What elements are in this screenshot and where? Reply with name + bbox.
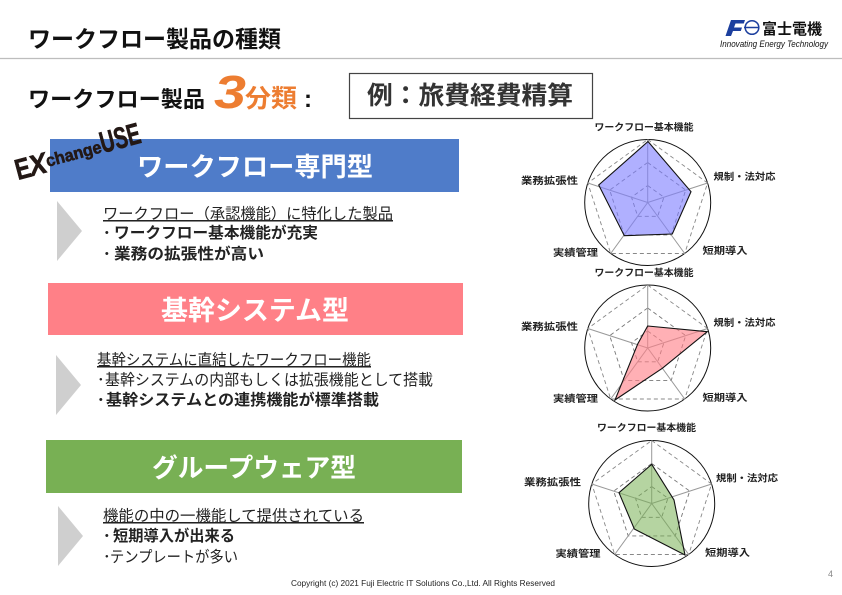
radar chart 1: 実績管理 (553, 247, 599, 259)
arrow 2 (56, 355, 81, 415)
radar chart 1: 業務拡張性 (521, 175, 579, 187)
text block 1: 業務の拡張性が高い (114, 245, 264, 263)
radar chart 1: ワークフロー基本機能 (594, 122, 694, 134)
arrow 3 (58, 506, 83, 566)
text block 1: ･ (103, 225, 111, 242)
logo: ExchangeUSE: E (12, 152, 34, 187)
logo: ExchangeUSE: change (44, 138, 104, 171)
radar chart 1 (521, 122, 776, 266)
text block 3: 機能の中の一機能して提供されている (103, 508, 364, 525)
logo: Fuji Electric: 富士電機 (762, 20, 822, 38)
subtitle: three categories (28, 66, 312, 118)
radar chart 1: 規制・法対応 (714, 171, 776, 183)
band: core system (48, 283, 463, 335)
radar chart 2: 実績管理 (553, 393, 599, 405)
logo: ExchangeUSE: X (23, 147, 52, 184)
text block 3: 短期導入が出来る (113, 527, 235, 545)
radar chart 2: 業務拡張性 (521, 321, 579, 333)
text block 3: ･ (103, 549, 111, 566)
radar chart 1: 短期導入 (702, 245, 748, 257)
band: groupware (46, 440, 462, 493)
subtitle: three categories: 3 (214, 66, 247, 118)
text block 2: ･ (97, 372, 105, 389)
logo: ExchangeUSE: USE (96, 117, 144, 160)
radar chart 2: ワークフロー基本機能 (594, 267, 694, 279)
text block 3: ･ (103, 528, 111, 545)
example box: 例：旅費経費精算 (367, 82, 573, 110)
logo: ExchangeUSE (10, 117, 145, 187)
text block 2 (97, 352, 433, 409)
radar chart 3: 業務拡張性 (524, 476, 582, 488)
text block 1: ･ (103, 246, 111, 263)
example box (350, 74, 592, 118)
band: workflow specialised: ワークフロー専門型 (137, 152, 373, 182)
radar chart 3 (524, 422, 779, 566)
radar chart 2: 短期導入 (702, 392, 748, 404)
subtitle: three categories: 分類 (245, 85, 297, 113)
band: groupware: グループウェア型 (152, 453, 356, 483)
subtitle: three categories: : (304, 86, 312, 113)
logo: Fuji Electric (720, 20, 829, 50)
text block 1 (103, 206, 393, 263)
page number: 4 (828, 569, 833, 579)
radar chart 3: 短期導入 (705, 547, 751, 559)
band: workflow specialised (50, 139, 459, 192)
radar chart 3: 実績管理 (556, 548, 601, 560)
text block 1: ワークフロー（承認機能）に特化した製品 (103, 206, 393, 223)
text block 2: 基幹システムの内部もしくは拡張機能として搭載 (105, 372, 433, 389)
footer copyright: Copyright (c) 2021 Fuji Electric IT Solutions Co.,Ltd. All Rights Reserved (291, 579, 555, 588)
subtitle: three categories: ワークフロー製品 (28, 87, 205, 112)
band: core system: 基幹システム型 (161, 296, 349, 326)
arrow 1 (57, 201, 82, 261)
text block 3 (103, 508, 364, 566)
text block 2: 基幹システムに直結したワークフロー機能 (97, 352, 371, 369)
radar chart 3: ワークフロー基本機能 (597, 422, 697, 434)
radar chart 2 (521, 267, 776, 411)
text block 1: ワークフロー基本機能が充実 (114, 224, 318, 242)
radar chart 3: 規制・法対応 (716, 472, 779, 484)
title: ワークフロー製品の種類 (28, 26, 281, 52)
radar chart 2: 規制・法対応 (714, 317, 776, 329)
text block 2: 基幹システムとの連携機能が標準搭載 (106, 391, 379, 409)
text block 2: ･ (97, 392, 105, 409)
text block 3: テンプレートが多い (110, 548, 238, 566)
